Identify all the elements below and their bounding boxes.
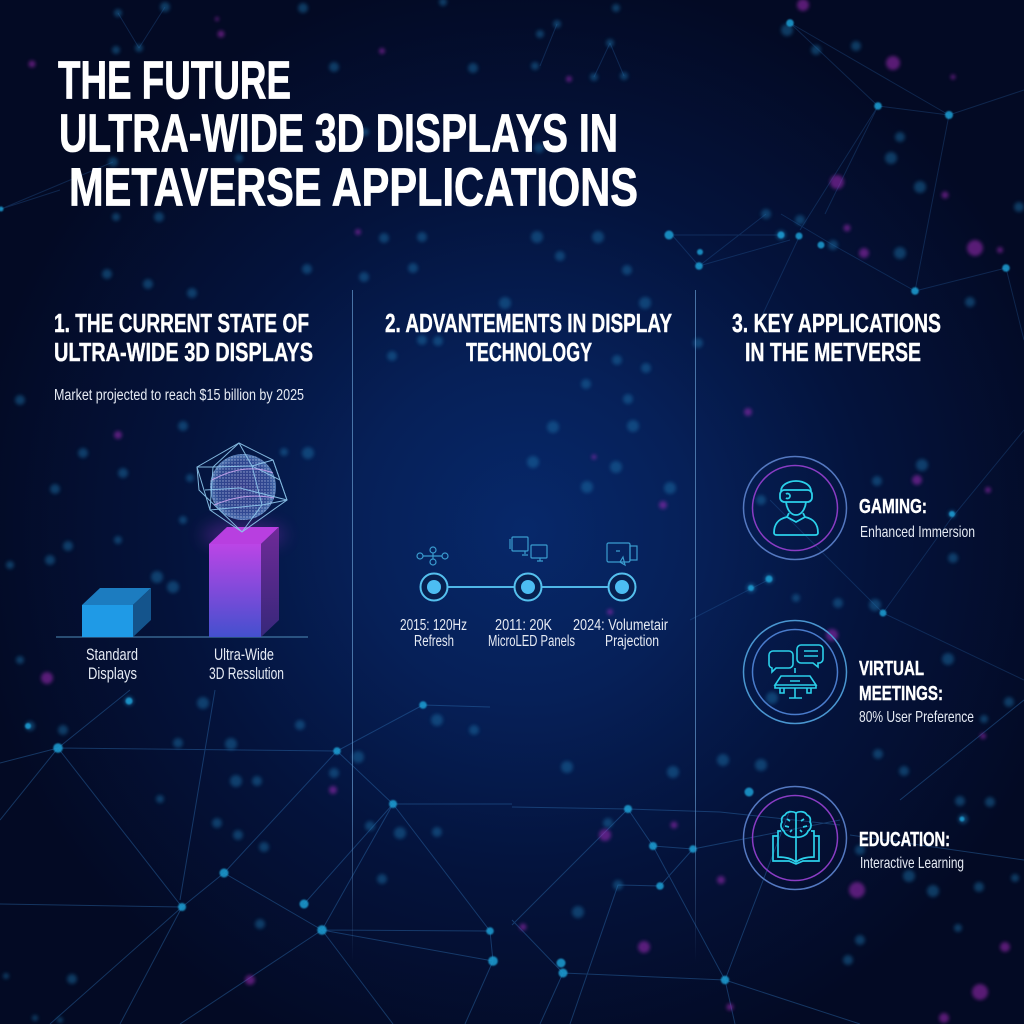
- heading: section 3: IN THE METVERSE: [745, 337, 921, 367]
- text: education: EDUCATION:: [859, 828, 950, 851]
- bar: standard displays: [82, 588, 151, 637]
- icon: monitors: [510, 537, 547, 561]
- title: [58, 50, 638, 218]
- label: 2024: 2024: Volumetair: [573, 617, 668, 634]
- application: education: [744, 786, 964, 890]
- icon: wireframe sphere: [197, 443, 287, 532]
- market projection text: Market projected to reach $15 billion by 2025: [54, 387, 304, 404]
- title: METAVERSE APPLICATIONS: [69, 158, 638, 218]
- label: 2011: [488, 617, 575, 650]
- label: 2015: [400, 617, 467, 650]
- heading: section 2: TECHNOLOGY: [466, 337, 592, 367]
- bar: ultra-wide 3D: [202, 521, 286, 637]
- label: ultra-wide 3D resolution: [209, 646, 284, 683]
- text: virtual meetings: VIRTUAL: [859, 657, 924, 680]
- heading: section 1: [54, 308, 313, 367]
- icon: VR headset user: [744, 456, 846, 560]
- application: gaming: Enhanced Immersion: [860, 524, 975, 541]
- application: virtual meetings: 80% User Preference: [859, 709, 974, 726]
- title: ULTRA-WIDE 3D DISPLAYS IN: [59, 104, 618, 164]
- label: 2024: Prajection: [605, 633, 659, 650]
- icon: brain and open book: [744, 786, 846, 890]
- label: 2015: Refresh: [414, 633, 454, 650]
- heading: section 2: 2. ADVANTEMENTS IN DISPLAY: [385, 308, 672, 338]
- heading: section 3: 3. KEY APPLICATIONS: [732, 308, 941, 338]
- application: gaming: [744, 456, 975, 560]
- node: 2015: [420, 574, 448, 600]
- timeline: [400, 537, 668, 650]
- application: virtual meetings: MEETINGS:: [859, 682, 943, 705]
- label: 2011: MicroLED Panels: [488, 633, 575, 650]
- icon: projection screen: [607, 543, 637, 565]
- bar chart: [56, 443, 308, 683]
- heading: section 1: ULTRA-WIDE 3D DISPLAYS: [54, 337, 313, 367]
- node: 2024: [608, 574, 636, 600]
- panel: key applications: [732, 308, 975, 890]
- application: education: Interactive Learning: [860, 855, 964, 872]
- icon: meeting table with chat bubbles: [744, 620, 846, 724]
- label: standard displays: [86, 646, 138, 683]
- label: 2011: 2011: 20K: [495, 617, 553, 634]
- heading: section 2: [385, 308, 672, 367]
- label: 2015: 2015: 120Hz: [400, 617, 467, 634]
- heading: section 3: [732, 308, 941, 367]
- label: ultra-wide 3D resolution: 3D Resslution: [209, 665, 284, 683]
- application: virtual meetings: [744, 620, 974, 726]
- text: gaming: GAMING:: [859, 495, 927, 518]
- heading: section 1: 1. THE CURRENT STATE OF: [54, 308, 309, 338]
- column dividers: [352, 290, 696, 962]
- panel: display technology: [385, 308, 672, 650]
- label: ultra-wide 3D resolution: Ultra-Wide: [214, 646, 274, 664]
- label: standard displays: Displays: [88, 665, 137, 683]
- title: THE FUTURE: [58, 50, 291, 110]
- panel: current state: [54, 308, 313, 683]
- label: 2024: [573, 617, 668, 650]
- icon: connected nodes: [417, 547, 448, 565]
- label: standard displays: Standard: [86, 646, 138, 664]
- node: 2011: [514, 574, 542, 600]
